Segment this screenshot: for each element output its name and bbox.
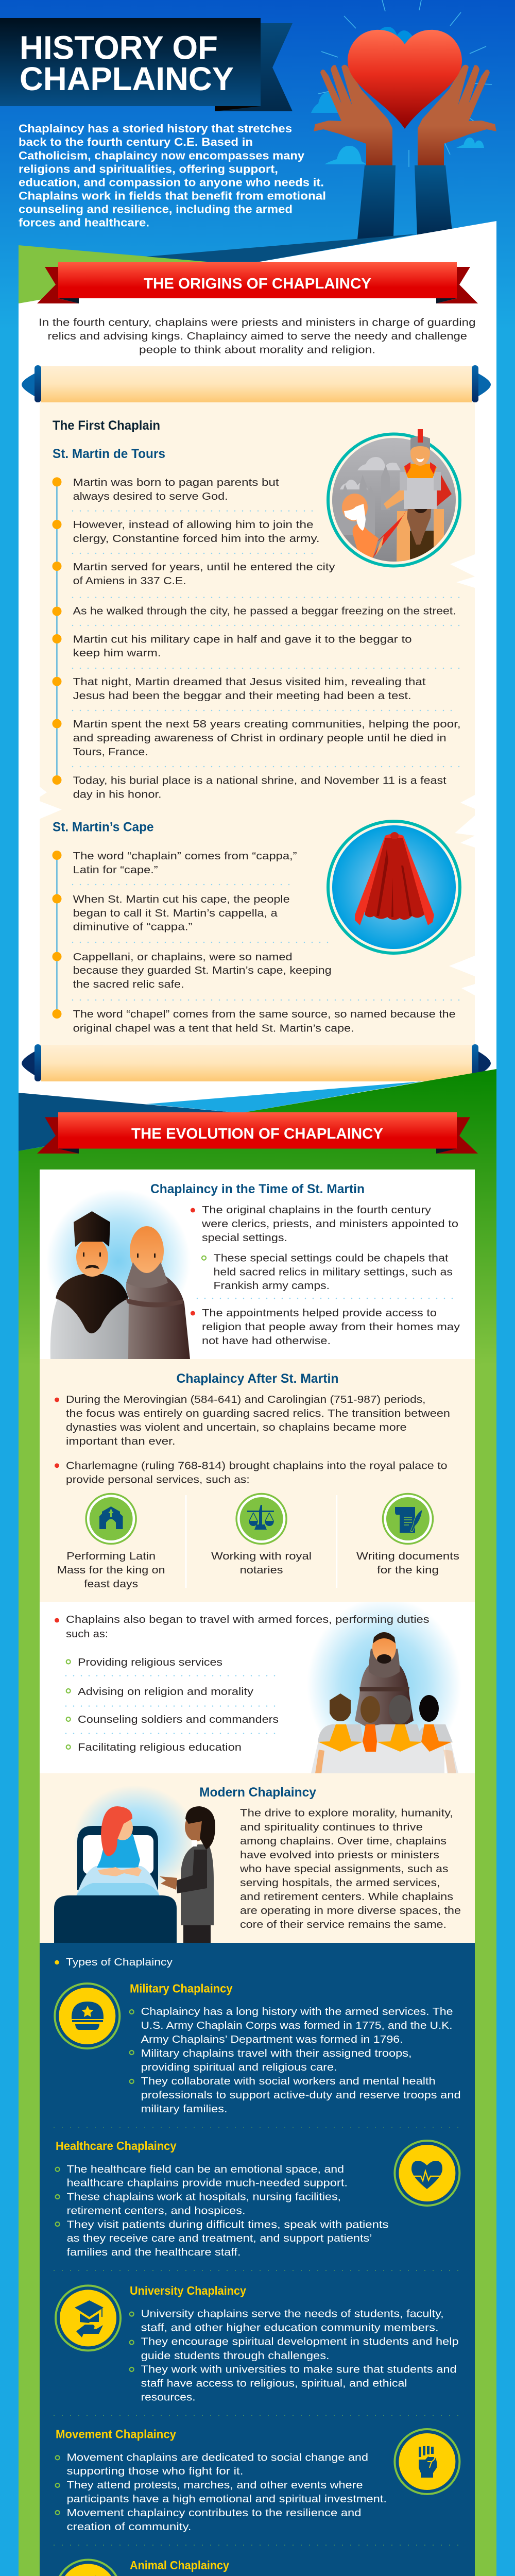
timeline: St. Martin de Tours: Jesus had been the beggar and their meeting had been a test.	[73, 690, 411, 702]
card: healthcare chaplaincy: They visit patients during difficult times, speak with patients	[67, 2218, 388, 2230]
hero illustration: heart held by two hands	[311, 0, 496, 239]
ribbon heading: the origins of chaplaincy: THE ORIGINS OF CHAPLAINCY	[144, 276, 371, 292]
card: movement chaplaincy: Movement Chaplaincy	[56, 2428, 176, 2441]
card: movement chaplaincy: participants have a high emotional and spiritual investment.	[67, 2493, 387, 2505]
panel: chaplaincy after St. Martin: Charlemagne (ruling 768-814) brought chaplains into the royal palace to	[66, 1460, 448, 1471]
card: movement chaplaincy: Movement chaplaincy contributes to the resilience and	[67, 2507, 362, 2519]
card: movement chaplaincy: supporting those who fight for it.	[67, 2465, 243, 2477]
heading: St. Martin's Cape: St. Martin’s Cape	[53, 820, 154, 835]
panel: parchment scroll	[22, 365, 491, 1081]
timeline: St. Martin de Tours: of Amiens in 337 C.E.	[73, 575, 186, 587]
icon: military hat	[55, 1984, 119, 2048]
timeline: St. Martin's Cape: the sacred relic safe.	[73, 978, 184, 990]
panel: modern chaplaincy: have evolved into priests or ministers	[240, 1849, 439, 1861]
timeline: St. Martin's Cape: diminutive of “cappa.”	[73, 921, 193, 933]
intro text: religions and spiritualities, offering support,	[19, 163, 278, 175]
intro text: education, and compassion to anyone who needs it.	[19, 176, 324, 189]
card: military chaplaincy: providing spiritual and religious care.	[141, 2061, 337, 2073]
intro text: counseling and resilience, including the armed	[19, 203, 293, 215]
card: animal chaplaincy: Animal Chaplaincy	[130, 2558, 229, 2572]
ribbon heading: the evolution of chaplaincy: THE EVOLUTION OF CHAPLAINCY	[131, 1126, 383, 1142]
panel: origins background shapes	[19, 221, 496, 1133]
heading: St. Martin de Tours: St. Martin de Tours	[53, 447, 165, 461]
text: chaplains with armed forces: Chaplains also began to travel with armed forces, performing duties	[66, 1614, 429, 1625]
timeline: St. Martin de Tours: clergy, Constantine forced him into the army.	[73, 533, 320, 545]
card: military chaplaincy: Military chaplains travel with their assigned troops,	[141, 2047, 412, 2059]
card: military chaplaincy: professionals to support active-duty and reserve troops and	[141, 2089, 461, 2101]
timeline: St. Martin's Cape: When St. Martin cut his cape, the people	[73, 893, 290, 905]
text: chaplains with armed forces: Advising on religion and morality	[78, 1686, 254, 1698]
timeline: St. Martin de Tours: always desired to serve God.	[73, 490, 228, 502]
panel: chaplaincy in the time of St. Martin: held sacred relics in military settings, such as	[213, 1266, 453, 1278]
panel: modern chaplaincy: The drive to explore morality, humanity,	[240, 1807, 453, 1819]
title banner: CHAPLAINCY	[20, 60, 234, 97]
origins intro text: In the fourth century, chaplains were priests and ministers in charge of guarding	[39, 316, 476, 329]
intro text	[19, 122, 326, 229]
panel: modern chaplaincy	[40, 1773, 475, 1943]
service label: Latin Mass	[57, 1550, 165, 1590]
timeline: St. Martin's Cape: because they guarded St. Martin’s cape, keeping	[73, 964, 332, 976]
panel: chaplaincy in the time of St. Martin: Frankish army camps.	[213, 1280, 330, 1292]
origins intro text: people to think about morality and religion.	[139, 344, 375, 355]
timeline: St. Martin de Tours: keep him warm.	[73, 647, 161, 659]
origins intro text	[39, 316, 476, 355]
timeline: St. Martin's Cape: Cappellani, or chaplains, were so named	[73, 951, 293, 963]
card: military chaplaincy: military families.	[141, 2103, 228, 2115]
timeline: St. Martin de Tours: Martin spent the next 58 years creating communities, helping the poor,	[73, 718, 461, 730]
service label: Latin Mass: Performing Latin	[66, 1550, 156, 1562]
panel: types of chaplaincy	[40, 1943, 475, 2576]
intro text: forces and healthcare.	[19, 216, 149, 229]
illustration: red cape medallion	[328, 821, 460, 953]
timeline: St. Martin de Tours: However, instead of allowing him to join the	[73, 519, 314, 531]
timeline: St. Martin's Cape: The word “chaplain” comes from “cappa,”	[73, 850, 297, 862]
icon: graduation cap in hand	[56, 2285, 121, 2350]
heading: the first chaplain: The First Chaplain	[53, 418, 160, 433]
panel: modern chaplaincy: core of their service remains the same.	[240, 1919, 447, 1930]
service label: writing documents: Writing documents	[356, 1550, 459, 1562]
card: healthcare chaplaincy: The healthcare field can be an emotional space, and	[67, 2163, 344, 2175]
intro text: Chaplains work in fields that benefit from emotional	[19, 190, 326, 202]
service label: royal notaries: Working with royal	[211, 1550, 312, 1562]
panel: chaplaincy after St. Martin: important than ever.	[66, 1435, 175, 1447]
timeline: St. Martin de Tours: Tours, France.	[73, 746, 148, 758]
card: military chaplaincy: Army Chaplains’ Department was formed in 1796.	[141, 2033, 403, 2045]
card: military chaplaincy: U.S. Army Chaplain Corps was formed in 1775, and the U.K.	[141, 2020, 453, 2031]
card: university chaplaincy	[130, 2284, 459, 2403]
panel: armed forces background	[40, 1602, 475, 1773]
panel: chaplaincy in the time of St. Martin: were clerics, priests, and ministers appointed to	[201, 1218, 458, 1230]
text: chaplains with armed forces: Counseling soldiers and commanders	[78, 1714, 279, 1725]
card: healthcare chaplaincy: families and the healthcare staff.	[67, 2246, 241, 2258]
ribbon heading: the origins of chaplaincy	[37, 262, 478, 303]
panel: chaplaincy in the time of St. Martin: The appointments helped provide access to	[202, 1307, 437, 1319]
icon: scales of justice	[236, 1494, 286, 1544]
panel: chaplaincy in the time of St. Martin: not have had otherwise.	[202, 1335, 331, 1347]
text: chaplains with armed forces: Facilitating religious education	[78, 1741, 242, 1753]
icon: raised fist	[394, 2429, 459, 2494]
service label: writing documents: for the king	[377, 1564, 439, 1576]
timeline: St. Martin de Tours: As he walked through the city, he passed a beggar freezing on the street.	[73, 605, 456, 617]
panel: chaplaincy after St. Martin: Chaplaincy After St. Martin	[176, 1371, 339, 1386]
timeline: St. Martin's Cape	[53, 850, 460, 1035]
service label: writing documents	[356, 1550, 459, 1576]
title banner: HISTORY OF	[20, 29, 218, 66]
card: university chaplaincy: University chaplains serve the needs of students, faculty,	[141, 2308, 444, 2320]
timeline: St. Martin de Tours: Martin served for years, until he entered the city	[73, 561, 335, 573]
timeline: St. Martin de Tours: and spreading awareness of Christ in ordinary people until he died in	[73, 732, 447, 744]
intro text: Catholicism, chaplaincy now encompasses many	[19, 149, 305, 162]
text: chaplains with armed forces	[55, 1614, 429, 1753]
service label: royal notaries: notaries	[240, 1564, 283, 1576]
card: university chaplaincy: They encourage spiritual development in students and help	[141, 2335, 459, 2347]
intro text: back to the fourth century C.E. Based in	[19, 135, 253, 148]
panel: types of chaplaincy: Types of Chaplaincy	[66, 1956, 173, 1968]
icon: dog	[56, 2560, 121, 2576]
card: military chaplaincy	[130, 1982, 461, 2115]
card: healthcare chaplaincy: Healthcare Chaplaincy	[56, 2139, 177, 2153]
text: chaplains with armed forces: Providing religious services	[78, 1656, 222, 1668]
panel: chaplaincy in the time of St. Martin: Chaplaincy in the Time of St. Martin	[150, 1182, 365, 1196]
timeline: St. Martin de Tours: That night, Martin dreamed that Jesus visited him, revealing that	[73, 676, 426, 688]
timeline: St. Martin de Tours: Martin was born to pagan parents but	[73, 477, 279, 488]
card: military chaplaincy: They collaborate with social workers and mental health	[141, 2075, 436, 2087]
timeline: St. Martin de Tours	[53, 477, 461, 801]
illustration: St. Martin on horseback sharing cape with beggar	[328, 429, 460, 567]
panel: chaplaincy in the time of St. Martin: The original chaplains in the fourth century	[202, 1204, 432, 1216]
panel: evolution background shapes	[19, 1069, 496, 2576]
illustration: chaplain visiting hospital patient	[54, 1785, 215, 1943]
panel: modern chaplaincy: among chaplains. Over time, chaplains	[240, 1835, 447, 1847]
intro text: Chaplaincy has a storied history that stretches	[19, 122, 292, 135]
card: movement chaplaincy: Movement chaplains are dedicated to social change and	[67, 2451, 368, 2463]
card: healthcare chaplaincy	[56, 2139, 389, 2258]
panel: chaplaincy in the time of St. Martin: These special settings could be chapels that	[213, 1252, 449, 1264]
service label: Latin Mass: Mass for the king on	[57, 1564, 165, 1576]
panel: modern chaplaincy: who have special assignments, such as	[239, 1863, 448, 1875]
timeline: St. Martin de Tours: day in his honor.	[73, 788, 162, 801]
card: movement chaplaincy: creation of community.	[67, 2521, 192, 2533]
card: military chaplaincy: Military Chaplaincy	[130, 1982, 233, 1995]
panel: modern chaplaincy: are operating in more diverse spaces, the	[240, 1905, 461, 1917]
card: university chaplaincy: They work with universities to make sure that students and	[141, 2364, 457, 2376]
origins intro text: relics and advising kings. Chaplaincy aimed to serve the needy and challenge	[47, 330, 467, 342]
card: movement chaplaincy: They attend protests, marches, and other events where	[67, 2479, 363, 2491]
ribbon heading: the evolution of chaplaincy	[37, 1112, 478, 1154]
card: university chaplaincy: staff have access to religious, spiritual, and ethical	[141, 2378, 407, 2389]
card: healthcare chaplaincy: as they receive care and treatment, and support patients’	[67, 2232, 372, 2244]
timeline: St. Martin's Cape: began to call it St. Martin’s cappella, a	[73, 907, 278, 919]
panel: modern chaplaincy: and spirituality continues to thrive	[240, 1821, 423, 1833]
card: university chaplaincy: guide students through challenges.	[141, 2350, 330, 2362]
panel: modern chaplaincy: and retirement centers. While chaplains	[240, 1891, 453, 1903]
illustration: fourth-century clerics	[46, 1189, 191, 1359]
timeline: St. Martin de Tours: Martin cut his military cape in half and gave it to the beggar to	[73, 634, 412, 646]
illustration: friar preaching to soldiers	[307, 1597, 461, 1773]
timeline: St. Martin's Cape: original chapel was a tent that held St. Martin’s cape.	[73, 1022, 354, 1035]
panel: chaplaincy in the time of St. Martin: special settings.	[202, 1232, 287, 1244]
timeline: St. Martin de Tours: Today, his burial place is a national shrine, and November 11 is a feast	[73, 775, 447, 787]
card: healthcare chaplaincy: These chaplains work at hospitals, nursing facilities,	[67, 2191, 341, 2203]
timeline: St. Martin's Cape: The word “chapel” comes from the same source, so named because the	[73, 1008, 456, 1020]
panel: chaplaincy after St. Martin: dynasties was violent and uncertain, so chaplains became more	[66, 1421, 407, 1433]
card: healthcare chaplaincy: retirement centers, and hospices.	[67, 2205, 245, 2216]
service label: royal notaries	[211, 1550, 312, 1576]
card: university chaplaincy: University Chaplaincy	[130, 2284, 246, 2297]
icon: heart with pulse	[394, 2141, 459, 2206]
panel: chaplaincy in the time of St. Martin	[40, 1170, 475, 1359]
card: movement chaplaincy	[56, 2428, 387, 2533]
text: chaplains with armed forces: such as:	[66, 1628, 108, 1640]
panel: chaplaincy after St. Martin: provide personal services, such as:	[66, 1473, 250, 1485]
service label: Latin Mass: feast days	[84, 1578, 138, 1590]
timeline: St. Martin's Cape: Latin for “cape.”	[73, 864, 158, 876]
card: military chaplaincy: Chaplaincy has a long history with the armed services. The	[141, 2006, 453, 2018]
panel: chaplaincy after St. Martin	[40, 1359, 475, 1602]
panel: modern chaplaincy: serving hospitals, the armed services,	[240, 1877, 440, 1889]
panel: chaplaincy after St. Martin: During the Merovingian (584-641) and Carolingian (751-987) periods,	[66, 1394, 425, 1405]
panel: chaplaincy after St. Martin: the focus was entirely on guarding sacred relics. The transition between	[66, 1408, 450, 1419]
icon: church	[86, 1494, 136, 1544]
panel: modern chaplaincy: Modern Chaplaincy	[199, 1785, 316, 1800]
card: healthcare chaplaincy: healthcare chaplains provide much-needed support.	[67, 2177, 348, 2189]
title banner	[0, 18, 293, 111]
icon: scroll and quill	[383, 1494, 433, 1544]
card: university chaplaincy: staff, and other higher education community members.	[141, 2321, 439, 2334]
panel: chaplaincy in the time of St. Martin: religion that people away from their homes may	[202, 1321, 460, 1333]
card: university chaplaincy: resources.	[141, 2392, 196, 2403]
